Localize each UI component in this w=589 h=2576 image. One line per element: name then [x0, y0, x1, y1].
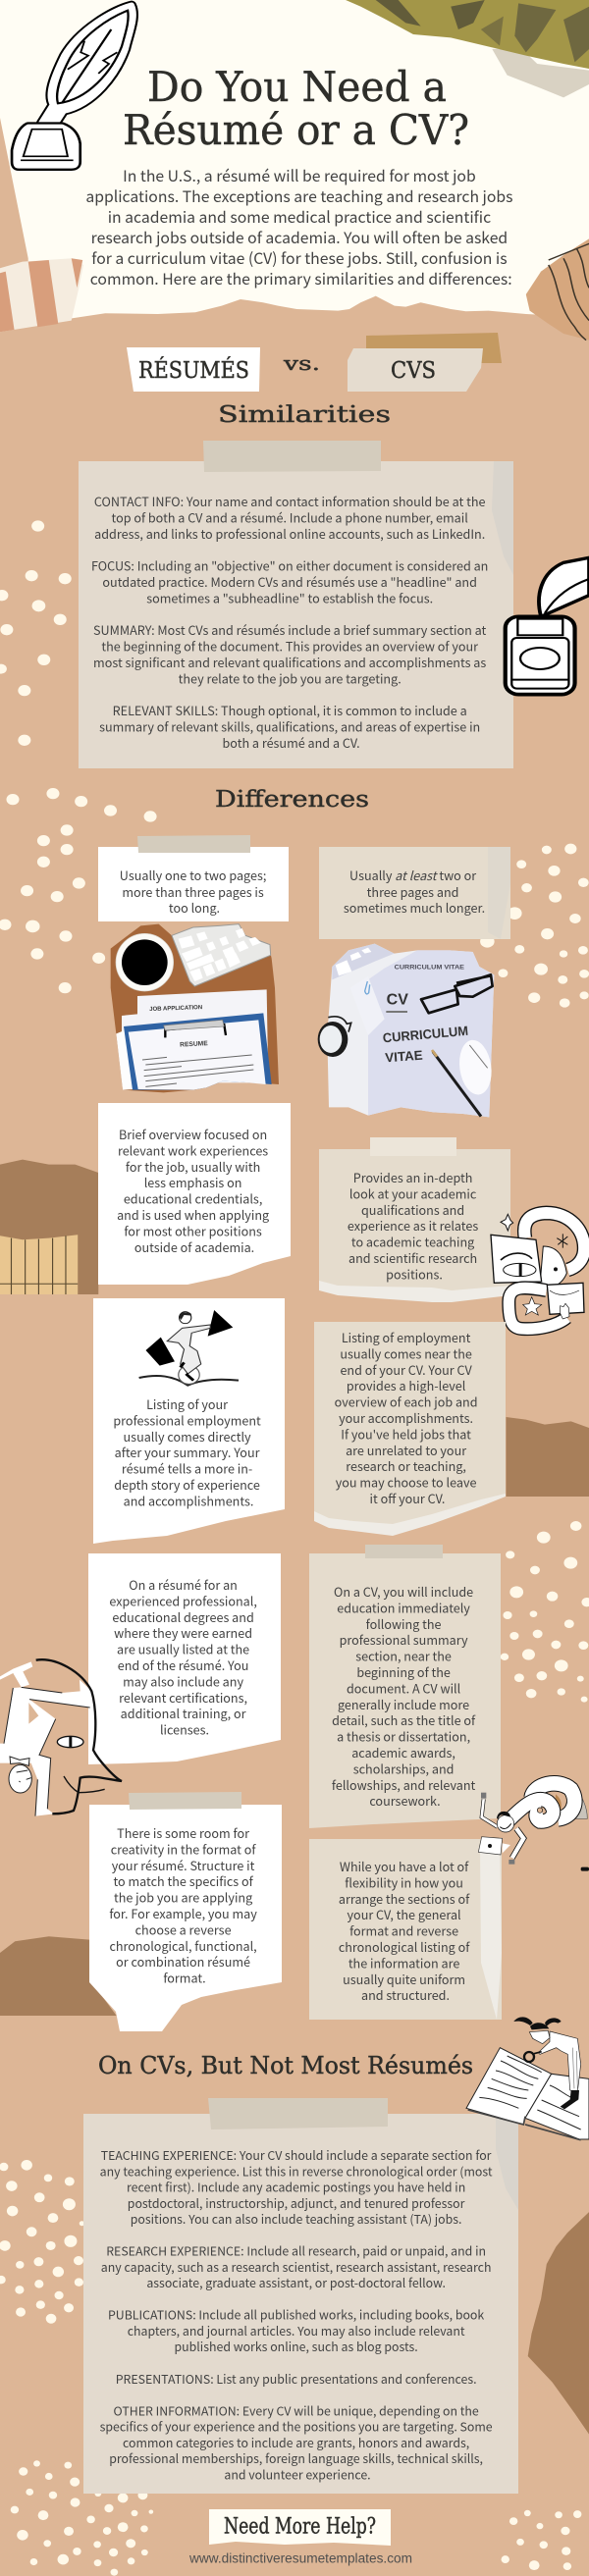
panel: CV education: a thesis or dissertation,: [337, 1727, 470, 1746]
panel: résumé format: creativity in the format of: [111, 1839, 256, 1858]
panel: résumé education: experienced professional,: [109, 1591, 257, 1609]
panel: on CVs only: specifics of your experience and the positions you are targeting. Some: [100, 2418, 493, 2436]
panel: résumé length: more than three pages is: [122, 882, 264, 901]
panel: CV format: format and reverse: [349, 1921, 458, 1940]
panel: CV format: the information are: [348, 1953, 459, 1971]
panel: similarities: SUMMARY: Most CVs and résumés include a brief summary section at: [93, 620, 487, 639]
panel: résumé employment with unicycle figure: after your summary. Your: [115, 1443, 260, 1461]
panel: résumé employment with unicycle figure: [93, 1298, 285, 1544]
craft paper, right middle: [506, 1417, 589, 1497]
doodle: juggler on unicycle: [139, 1310, 239, 1386]
panel: CV length: sometimes much longer.: [344, 898, 485, 917]
panel: CV length: Usually at least two or: [349, 866, 476, 884]
panel: on CVs only: [83, 2098, 518, 2494]
photo: job application and résumé on desk: [111, 924, 279, 1092]
panel: résumé format: to match the specifics of: [113, 1871, 254, 1890]
panel: CV employment: If you've held jobs that: [341, 1424, 471, 1443]
panel: CV employment: Listing of employment: [342, 1328, 471, 1346]
panel: résumé education: end of the résumé. You: [118, 1656, 248, 1674]
heading: differences: Differences: [215, 787, 369, 813]
panel: résumé length: Usually one to two pages;: [120, 866, 266, 884]
panel: CV employment: research or teaching,: [346, 1456, 466, 1475]
panel: similarities: they relate to the job you are targeting.: [179, 668, 402, 687]
panel: on CVs only: PRESENTATIONS: List any public presentations and conferences.: [116, 2370, 477, 2388]
panel: CV length: three pages and: [367, 882, 458, 901]
panel: résumé length: [98, 835, 289, 921]
panel: résumé employment with unicycle figure: usually comes directly: [124, 1427, 251, 1446]
panel: résumé employment with unicycle figure: résumé tells a more in-: [122, 1459, 252, 1478]
panel: résumé format: [89, 1792, 282, 2031]
panel: CV overview: experience as it relates: [348, 1216, 478, 1235]
panel: similarities: both a résumé and a CV.: [223, 733, 360, 752]
dots: right scatter, middle: [501, 1521, 589, 1703]
panel: CV format: flexibility in how you: [345, 1872, 463, 1891]
photo: curriculum vitae and glasses: VITAE: [385, 1048, 423, 1065]
dots: right scatter, upper: [480, 844, 589, 1008]
panel: CV employment: provides a high-level: [347, 1376, 466, 1394]
panel: résumé format: chronological, functional,: [109, 1936, 257, 1955]
panel: résumé overview: less emphasis on: [144, 1173, 241, 1191]
panel: CV format: your CV, the general: [348, 1905, 461, 1923]
intro paragraph: In the U.S., a résumé will be required for most job: [123, 164, 476, 186]
panel: résumé overview: for most other positions: [124, 1221, 262, 1239]
intro paragraph: applications. The exceptions are teaching and research jobs: [85, 184, 513, 207]
panel: résumé overview: outside of academia.: [134, 1237, 254, 1256]
panel: résumé overview: relevant work experiences: [118, 1140, 268, 1159]
panel: CV education: fellowships, and relevant: [332, 1775, 476, 1794]
photo: curriculum vitae and glasses: [318, 944, 495, 1117]
dots: left scatter, upper: [0, 520, 157, 993]
panel: CV employment: you may choose to leave: [336, 1473, 476, 1492]
panel: on CVs only: TEACHING EXPERIENCE: Your CV should include a separate section for: [101, 2146, 492, 2164]
panel: résumé format: There is some room for: [117, 1823, 249, 1842]
panel: CV education: On a CV, you will include: [334, 1582, 473, 1601]
doodle: eye and star collage figure: [491, 1213, 584, 1329]
panel: résumé format: or combination résumé: [116, 1952, 250, 1971]
panel: on CVs only: any teaching experience. List this in reverse chronological order (most: [100, 2162, 493, 2180]
panel: CV education: section, near the: [355, 1647, 452, 1665]
panel: résumé education: may also include any: [123, 1671, 243, 1690]
heading: similarities: Similarities: [218, 402, 391, 428]
panel: résumé education: On a résumé for an: [129, 1575, 238, 1594]
button: need more help: [209, 2509, 391, 2546]
panel: résumé format: the job you are applying: [114, 1888, 252, 1907]
heading: on CVs, but not most résumés: On CVs, But Not Most Résumés: [98, 2052, 473, 2079]
title: Résumé or a CV?: [123, 106, 469, 154]
panel: similarities: top of both a CV and a résumé. Include a phone number, email: [112, 507, 468, 526]
panel: similarities: CONTACT INFO: Your name and contact information should be at the: [94, 492, 485, 510]
panel: résumé overview: for the job, usually with: [126, 1157, 260, 1176]
panel: CV format: arrange the sections of: [339, 1889, 470, 1908]
label: résumés: RÉSUMÉS: [138, 357, 249, 384]
panel: CV education: [309, 1545, 501, 1829]
panel: CV employment: end of your CV. Your CV: [340, 1360, 472, 1379]
panel: CV employment: are unrelated to your: [346, 1441, 466, 1459]
label: CVs: CVS: [391, 358, 436, 384]
vs label: vs.: [283, 351, 320, 375]
panel: similarities: [79, 441, 513, 768]
panel: CV overview: Provides an in-depth: [353, 1168, 472, 1186]
title: [123, 63, 469, 154]
label: CVs: [348, 333, 502, 392]
panel: on CVs only: professional memberships, foreign language skills, technical skills,: [109, 2449, 483, 2467]
panel: CV education: following the: [366, 1614, 442, 1633]
panel: CV employment: usually comes near the: [340, 1343, 472, 1362]
panel: CV education: beginning of the: [356, 1662, 451, 1681]
panel: résumé education: additional training, or: [121, 1704, 246, 1722]
panel: CV education: coursework.: [369, 1791, 441, 1810]
panel: CV employment: your accomplishments.: [339, 1408, 473, 1427]
panel: résumé format: choose a reverse: [135, 1919, 232, 1938]
photo: job application and résumé on desk: JOB APPLICATION: [149, 1005, 202, 1013]
craft paper, right lower: [528, 2212, 589, 2435]
panel: résumé overview: [98, 1103, 291, 1285]
panel: similarities: the beginning of the document. This provides an overview of your: [101, 637, 478, 656]
panel: on CVs only: postdoctoral, instructorship, adjunct, and tenured professor: [128, 2194, 465, 2212]
photo: curriculum vitae and glasses: CV: [387, 992, 408, 1009]
panel: CV format: [309, 1839, 502, 2020]
torn olive paper, top right: [346, 0, 589, 97]
panel: résumé employment with unicycle figure: Listing of your: [146, 1394, 228, 1413]
panel: résumé education: relevant certifications,: [119, 1688, 247, 1707]
panel: CV overview: positions.: [386, 1264, 443, 1283]
doodle: curled figure with laptop: [478, 1783, 589, 1871]
dots: lower left and lower right scatter: [0, 2160, 581, 2576]
panel: CV education: education immediately: [337, 1598, 470, 1616]
panel: on CVs only: RESEARCH EXPERIENCE: Include all research, paid or unpaid, and in: [106, 2242, 486, 2260]
panel: résumé overview: educational credentials,: [124, 1189, 262, 1208]
panel: CV education: scholarships, and: [353, 1759, 454, 1777]
panel: similarities: sometimes a "subheadline" to establish the focus.: [146, 588, 433, 606]
panel: similarities: summary of relevant skills, qualifications, and areas of expertise in: [99, 717, 480, 736]
striped washi tape, left: [0, 258, 83, 332]
panel: CV employment: overview of each job and: [335, 1393, 478, 1411]
panel: résumé format: your résumé. Structure it: [112, 1856, 255, 1874]
panel: résumé education: educational degrees and: [112, 1607, 254, 1626]
photo: curriculum vitae and glasses: CURRICULUM VITAE: [395, 964, 465, 971]
panel: CV length: [319, 847, 510, 939]
intro paragraph: in academia and some medical practice and scientific: [108, 205, 491, 228]
panel: CV employment: [314, 1322, 506, 1536]
button: need more help: Need More Help?: [224, 2514, 376, 2540]
panel: résumé education: are usually listed at the: [117, 1640, 249, 1658]
panel: CV education: generally include more: [338, 1695, 469, 1713]
panel: on CVs only: published works online, such as blog posts.: [175, 2338, 418, 2355]
panel: CV overview: [319, 1137, 510, 1302]
panel: on CVs only: recent first). Include any academic postings you have held in: [127, 2179, 465, 2196]
panel: on CVs only: chapters, and journal articles. You may also include relevant: [128, 2322, 465, 2339]
panel: résumé employment with unicycle figure: depth story of experience: [114, 1475, 260, 1494]
doodle: upside-down figure with eye: [0, 1659, 122, 1816]
panel: similarities: most significant and relevant qualifications and accomplishments as: [93, 653, 486, 671]
craft paper with map lines, right: [526, 238, 589, 341]
panel: CV employment: it off your CV.: [370, 1489, 445, 1507]
panel: CV overview: qualifications and: [361, 1200, 464, 1219]
panel: CV overview: look at your academic: [349, 1183, 477, 1202]
panel: similarities: outdated practice. Modern CVs and résumés use a "headline" and: [102, 572, 477, 591]
panel: CV format: While you have a lot of: [340, 1857, 469, 1875]
cream torn header paper: [0, 0, 589, 327]
panel: on CVs only: associate, graduate assistant, or post-doctoral fellow.: [146, 2274, 446, 2291]
panel: CV education: academic awards,: [351, 1743, 455, 1761]
panel: résumé employment with unicycle figure: and accomplishments.: [124, 1491, 253, 1509]
panel: on CVs only: and volunteer experience.: [224, 2465, 371, 2483]
intro paragraph: research jobs outside of academia. You will often be asked: [91, 226, 508, 248]
photo: job application and résumé on desk: RESUME: [180, 1040, 208, 1049]
craft paper with grid, left: [0, 1160, 98, 1294]
panel: CV education: document. A CV will: [347, 1678, 461, 1697]
panel: résumé length: too long.: [169, 898, 220, 917]
panel: CV education: detail, such as the title of: [332, 1710, 476, 1729]
panel: résumé overview: and is used when applying: [117, 1205, 269, 1224]
panel: CV format: and structured.: [361, 1985, 450, 2004]
panel: CV format: usually quite uniform: [343, 1970, 465, 1988]
website url: www.distinctiveresumetemplates.com: [188, 2551, 412, 2566]
panel: CV overview: and scientific research: [348, 1248, 477, 1267]
panel: résumé format: for. For example, you may: [109, 1904, 257, 1922]
label: résumés: [127, 347, 260, 392]
title: Do You Need a: [147, 63, 447, 111]
panel: résumé education: licenses.: [160, 1720, 209, 1739]
panel: on CVs only: common categories to include are grants, honors and awards,: [123, 2434, 469, 2451]
panel: similarities: FOCUS: Including an "objective" on either document is considered an: [91, 556, 488, 575]
intro paragraph: common. Here are the primary similarities and differences:: [90, 267, 512, 289]
panel: on CVs only: positions. You can also include teaching assistant (TA) jobs.: [131, 2210, 461, 2228]
panel: résumé format: format.: [163, 1969, 206, 1987]
photo: curriculum vitae and glasses: CURRICULUM: [382, 1024, 469, 1045]
panel: CV overview: to academic teaching: [351, 1233, 474, 1251]
icon: quill and inkwell: [15, 5, 134, 167]
craft paper, left lower: [0, 1936, 117, 2016]
panel: on CVs only: any capacity, such as a research scientist, research assistant, research: [101, 2258, 491, 2276]
intro paragraph: for a curriculum vitae (CV) for these jobs. Still, confusion is: [91, 246, 508, 269]
doodle: girl reading an open book with magnifier: [466, 2017, 589, 2140]
panel: CV format: chronological listing of: [339, 1937, 470, 1956]
panel: résumé education: where they were earned: [114, 1623, 252, 1642]
panel: on CVs only: OTHER INFORMATION: Every CV will be unique, depending on the: [114, 2401, 479, 2419]
icon: ink bottle with feather: [506, 557, 589, 695]
panel: CV education: professional summary: [340, 1630, 468, 1649]
panel: résumé education: [88, 1553, 281, 1764]
panel: similarities: RELEVANT SKILLS: Though optional, it is common to include a: [113, 701, 467, 719]
panel: résumé overview: Brief overview focused on: [119, 1125, 267, 1143]
panel: on CVs only: PUBLICATIONS: Include all published works, including books, book: [108, 2306, 484, 2324]
panel: résumé employment with unicycle figure: professional employment: [113, 1410, 261, 1429]
panel: similarities: address, and links to professional online accounts, such as LinkedIn.: [94, 524, 485, 543]
